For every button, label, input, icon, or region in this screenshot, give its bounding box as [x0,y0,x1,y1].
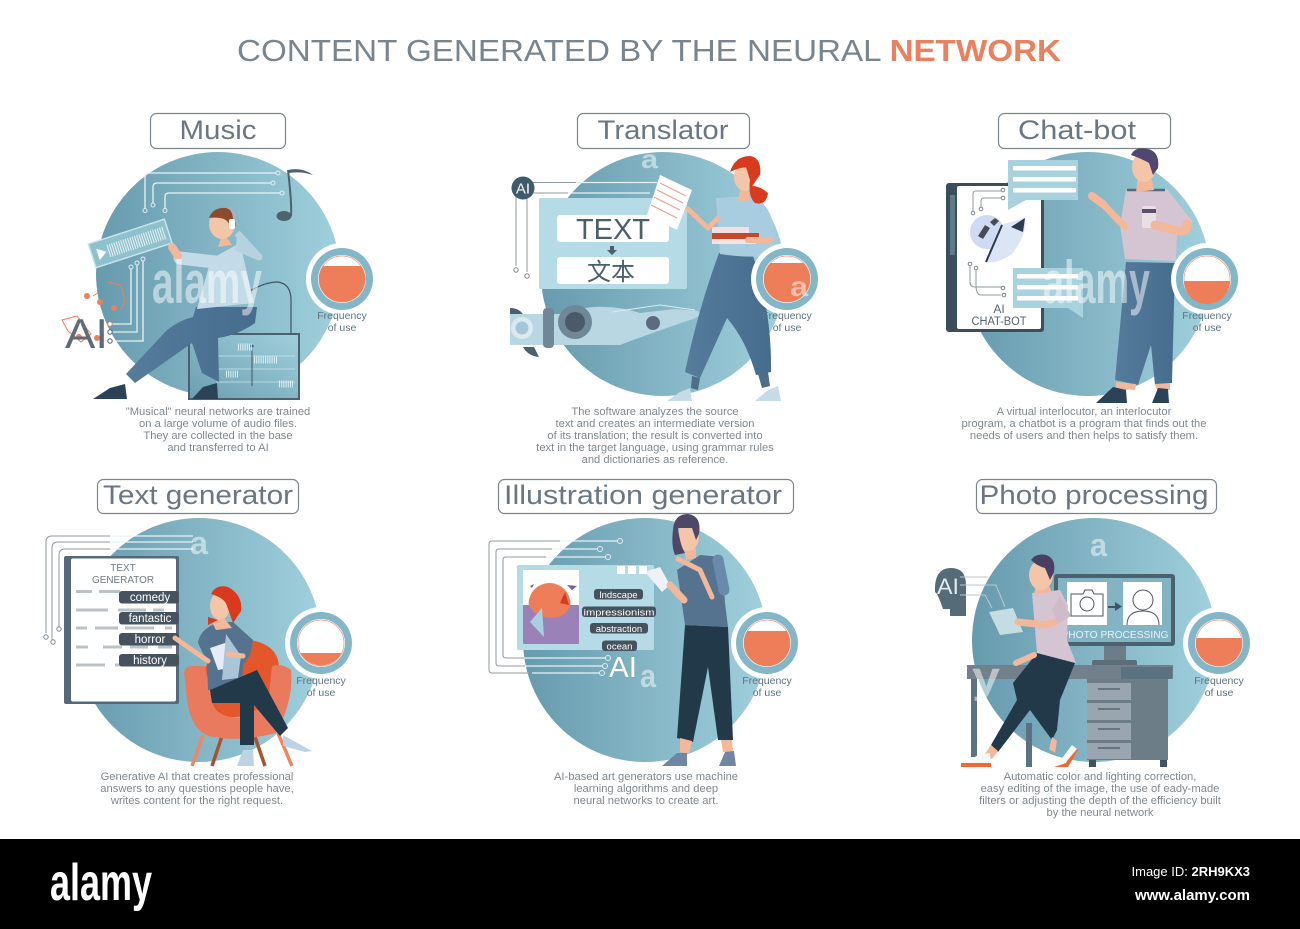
translation screen: 文本 [587,259,635,286]
label: frequency of use: of use [1193,322,1221,334]
heading: photo processing: Photo processing [980,480,1208,510]
label: frequency of use: Frequency [317,310,368,322]
footer band: www.alamy.com [1134,887,1250,904]
person: music listener [93,207,259,399]
heading: chat-bot [998,114,1170,148]
description: text generator: answers to any questions people have, [100,783,294,795]
panel: photo processing [935,480,1255,819]
person: man at desk [961,555,1078,767]
tag: horror: horror [135,634,166,646]
tag: comedy: comedy [130,592,170,604]
badge: AI: AI [516,180,530,198]
generator screen [517,565,656,652]
audio player [88,219,172,268]
label: frequency of use: of use [1205,687,1233,699]
person: woman with papers [647,156,781,401]
description: translator: text and creates an intermediate version [556,418,754,430]
tag: fantastic [119,612,179,625]
description: photo processing: by the neural network [1047,807,1154,819]
tag: fantastic: fantastic [129,613,172,625]
monitor: PHOTO PROCESSING [1062,629,1168,641]
gauge: chat-bot [1171,243,1243,315]
label: frequency of use: Frequency [296,675,347,687]
panel: music [62,114,378,454]
tag: history: history [133,655,167,667]
description: chat-bot: needs of users and then helps to satisfy them. [970,430,1198,442]
tag: ocean: ocean [607,642,632,652]
gauge: music [306,243,378,315]
label: frequency of use: of use [753,687,781,699]
label: frequency of use: Frequency [1182,310,1233,322]
watermark fragments: a [641,144,659,174]
tag: abstraction: abstraction [596,624,642,635]
icon: AI head [935,568,1005,616]
robot arm [510,305,699,357]
description: photo processing: filters or adjusting the depth of the efficiency built [979,795,1222,807]
gauge: illustration generator [731,607,803,679]
label: frequency of use: Frequency [742,675,793,687]
document: text generator [64,556,179,704]
description: chat-bot: A virtual interlocutor, an interlocutor [997,406,1172,418]
description: illustration generator: neural networks to create art. [574,795,718,807]
circuit lines: music top [143,171,284,212]
tag: horror [119,633,179,646]
translation screen [539,198,687,289]
watermark fragments [641,144,808,302]
description: music: They are collected in the base [143,430,293,442]
description: translator: The software analyzes the source [571,406,739,418]
label: frequency of use: of use [307,687,335,699]
title: CONTENT GENERATED BY THE NEURAL NETWORK [237,33,1062,68]
desk [967,665,1173,767]
tag: impressionism: impressionism [584,608,655,618]
panel: chat-bot [946,114,1243,442]
monitor [1054,574,1175,666]
footer band: Image ID: 2RH9KX3 [1132,864,1250,879]
watermark fragments: a [790,271,808,302]
icon: music note [276,169,313,221]
heading: music: Music [180,115,256,145]
panel: translator [510,114,823,466]
tag: landscape: lndscape [599,590,638,601]
AI mark with music notes: AI [65,310,108,357]
watermark fragments: y [972,653,1001,702]
label: frequency of use: Frequency [762,310,813,322]
heading: text generator: Text generator [103,480,293,510]
tag: history [119,654,179,667]
panel: illustration generator [489,480,803,807]
speech bubble top [1008,160,1078,210]
footer band [0,839,1300,929]
label: frequency of use: Frequency [1194,675,1245,687]
gauge: text generator [285,607,357,679]
description: text generator: writes content for the right request. [110,795,283,807]
badge: AI [512,176,534,200]
watermark: alamy [152,249,262,316]
AI mark: AI [609,652,637,684]
person: woman with tablet [645,514,736,766]
heading: translator: Translator [598,115,728,145]
gauge: translator [751,243,823,315]
description: music: "Musical" neural networks are trained [126,406,310,418]
tablet: AI chat-bot: CHAT-BOT [972,316,1026,328]
description: translator: and dictionaries as reference. [582,454,728,466]
speech bubble bottom [1013,268,1083,318]
translation screen: TEXT [576,214,650,246]
heading: translator [578,114,750,148]
document: text generator: GENERATOR [92,575,154,586]
description: translator: text in the target language, using grammar rules [536,442,774,454]
icon: robot [970,215,1025,262]
description: translator: of its translation; the result is converted into [547,430,763,442]
synthesizer box [189,334,299,399]
drawers [1087,683,1131,759]
description: photo processing: easy editing of the image, the use of eady-made [981,783,1219,795]
panel: text generator [44,480,357,807]
watermark fragments: a [1090,527,1107,563]
armchair [184,640,292,766]
cable [250,282,291,334]
tablet: AI chat-bot [946,183,1044,332]
description: illustration generator: AI-based art generators use machine [554,771,738,783]
description: photo processing: Automatic color and lighting correction, [1004,771,1196,783]
heading: music [150,114,286,148]
circuit lines: translator [514,182,657,278]
person: woman in armchair [175,586,312,766]
icon: AI head: AI [937,574,959,599]
description: text generator: Generative AI that creates professional [101,771,293,783]
description: chat-bot: program, a chatbot is a program that finds out the [961,418,1207,430]
footer band: alamy [50,854,152,912]
AI mark with music notes [62,282,125,357]
circuit lines: text generator [44,536,193,644]
description: illustration generator: learning algorithms and deep [574,783,718,795]
watermark fragment: a [190,525,208,561]
circuit lines: music lower [112,257,145,341]
heading: chat-bot: Chat-bot [1018,115,1137,145]
watermark: alamy [1043,249,1150,316]
circuit lines: illustration generator [489,538,622,676]
watermark fragments [972,527,1107,702]
gauge: photo processing [1183,607,1255,679]
label: frequency of use: of use [328,322,356,334]
heading: illustration generator: Illustration generator [504,480,782,510]
tablet: AI chat-bot: AI [993,302,1005,316]
label: frequency of use: of use [773,322,801,334]
tag: comedy [119,591,179,604]
document: text generator: TEXT [110,563,136,574]
description: music: and transferred to AI [167,442,269,454]
description: music: on a large volume of audio files. [139,418,297,430]
watermark fragment: a [640,658,656,694]
person: man with coffee [1092,148,1193,403]
